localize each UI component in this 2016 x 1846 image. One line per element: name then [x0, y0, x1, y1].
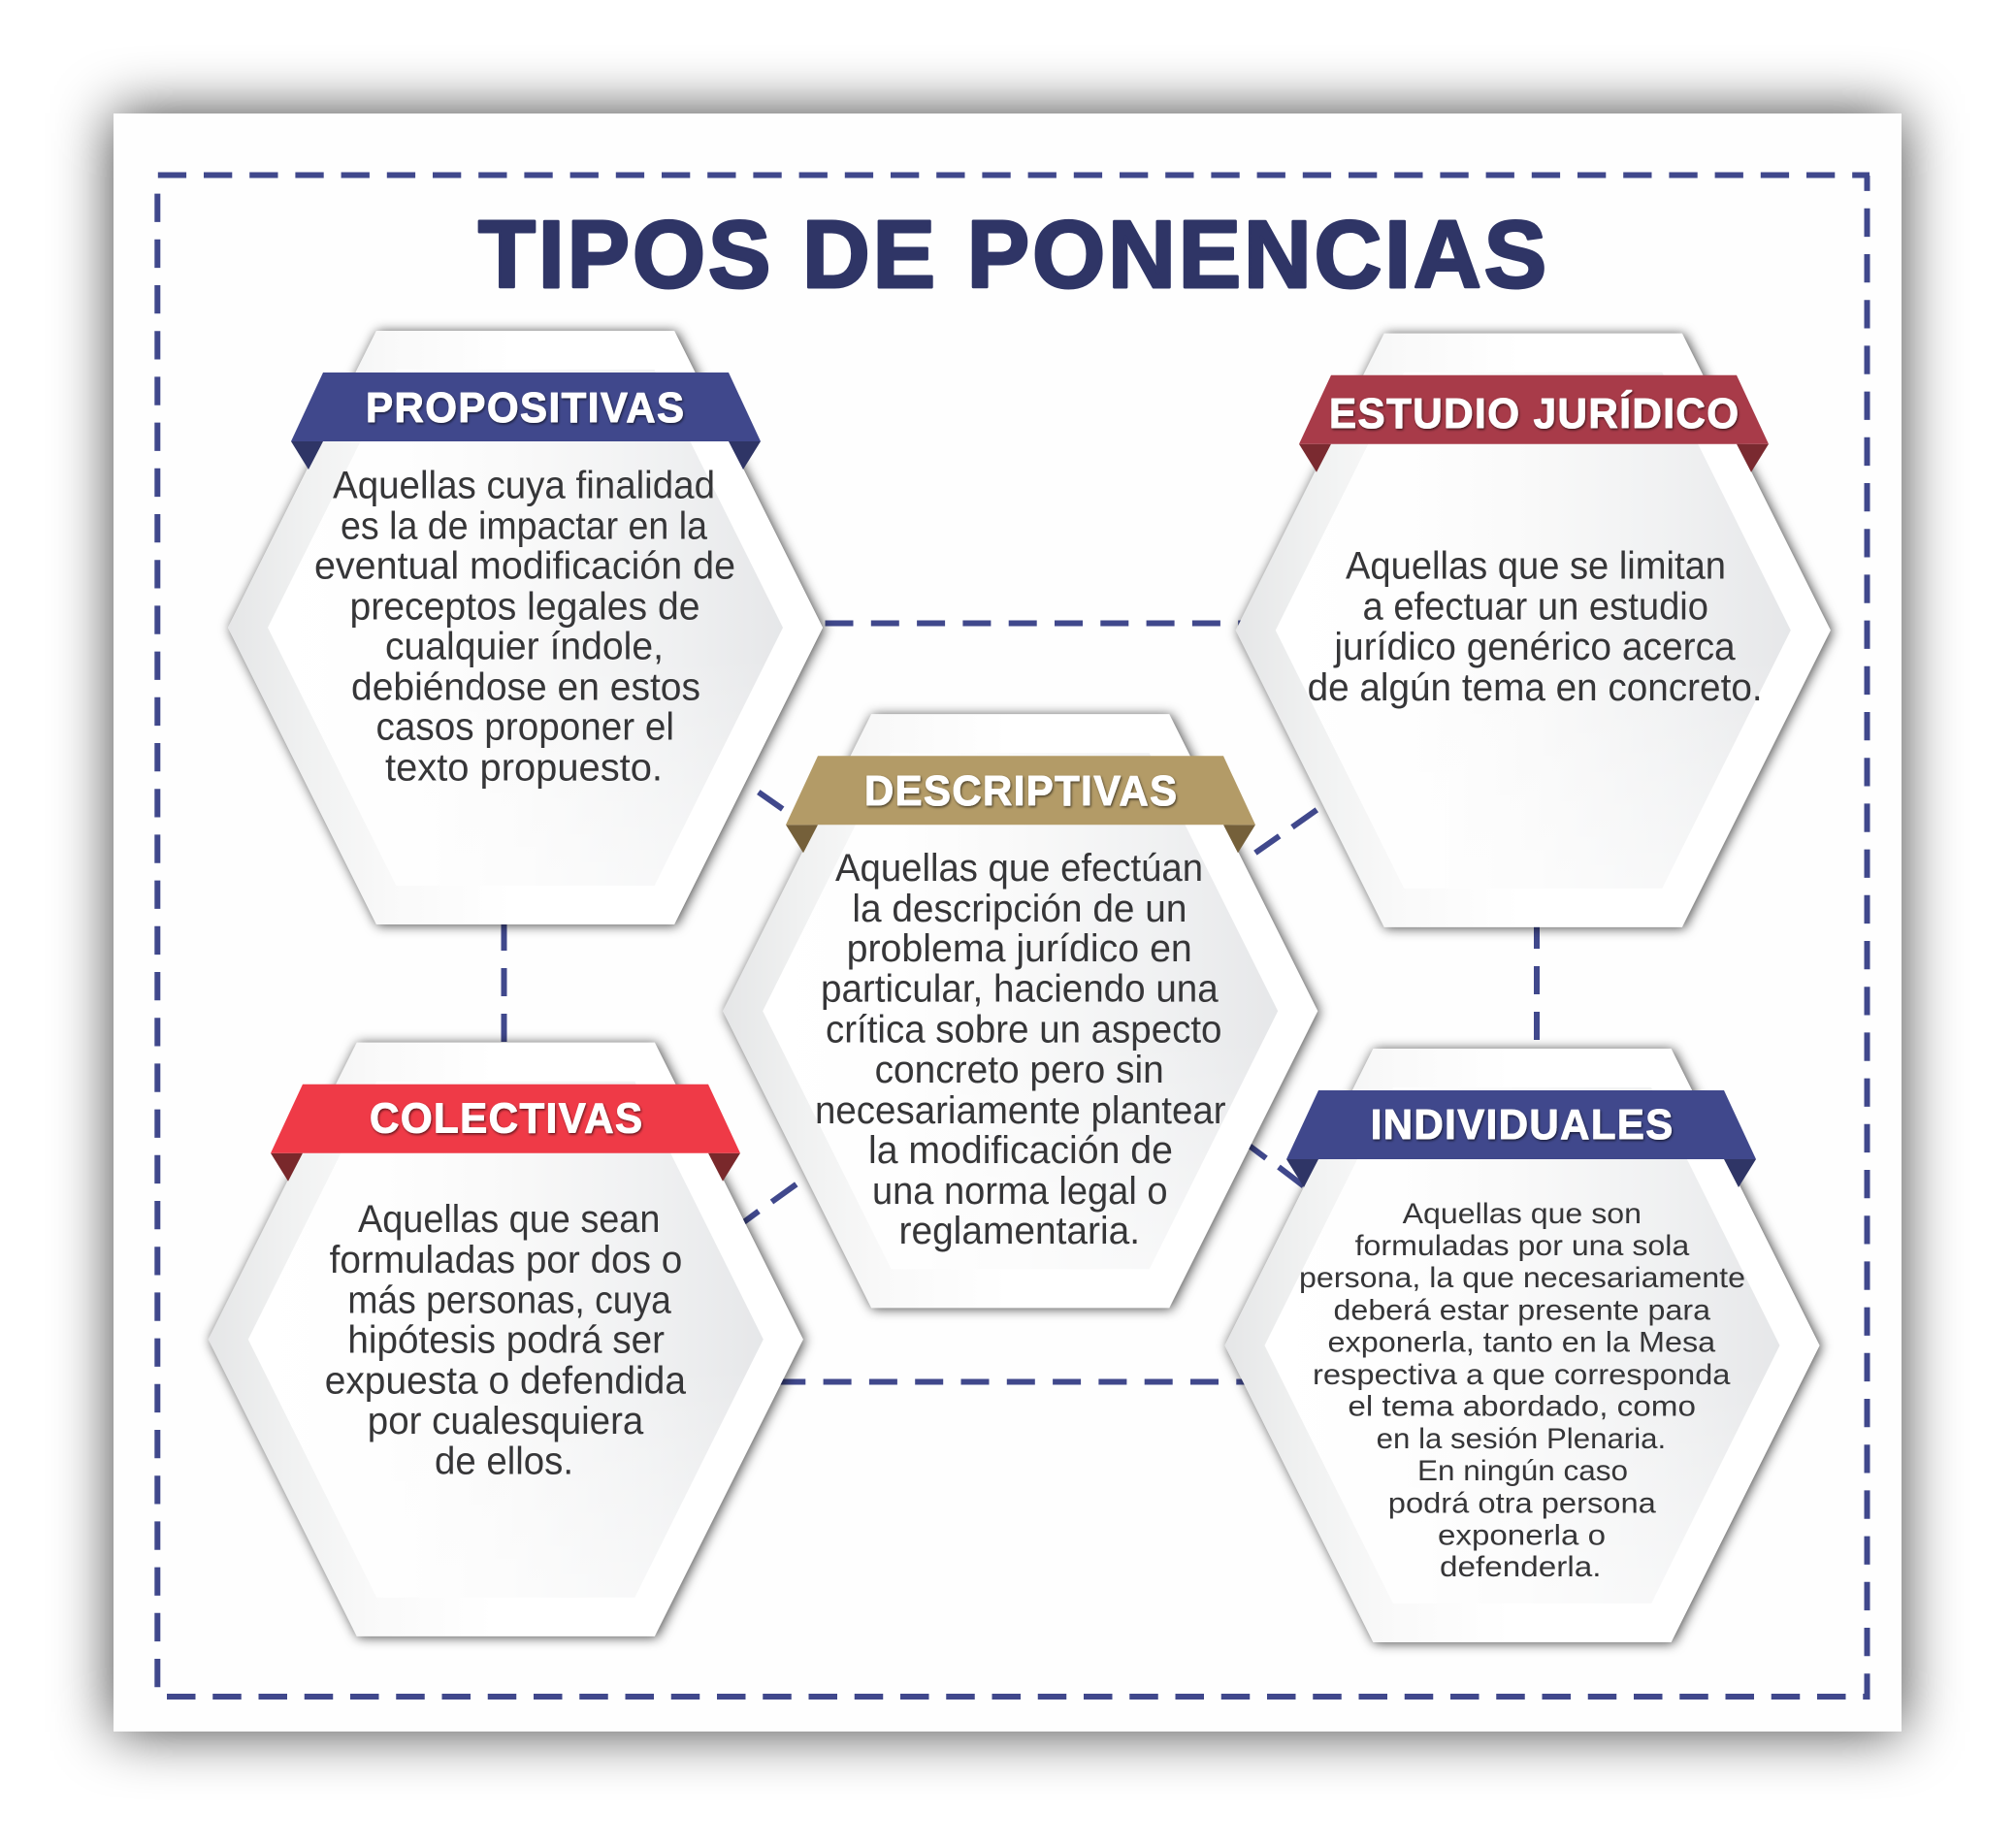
text: Propositivas description: preceptos legales de — [349, 585, 700, 628]
banner: Colectivas — [271, 1085, 740, 1182]
hexagon: Estudio Jurídico — [1236, 334, 1831, 927]
text: Colectivas description: hipótesis podrá ser — [347, 1319, 665, 1362]
hexagon: Propositivas — [228, 331, 823, 924]
text: Colectivas description: formuladas por dos o — [330, 1239, 682, 1281]
text: Descriptivas description: Aquellas que efectúan — [835, 847, 1203, 890]
panel: white sheet — [114, 113, 1902, 1732]
text: Individuales description: en la sesión Plenaria. — [1377, 1423, 1666, 1455]
text: Descriptivas description: particular, haciendo una — [821, 968, 1219, 1011]
text: Individuales description: exponerla, tanto en la Mesa — [1327, 1326, 1716, 1358]
banner: Estudio Jurídico — [1299, 375, 1769, 472]
text: Individuales description: el tema abordado, como — [1348, 1391, 1696, 1423]
text: Estudio Jurídico description: de algún tema en concreto. — [1308, 666, 1763, 709]
heading: Propositivas: PROPOSITIVAS — [366, 384, 685, 432]
heading: Individuales: INDIVIDUALES — [1371, 1101, 1675, 1149]
heading: Colectivas: COLECTIVAS — [370, 1094, 644, 1143]
text: Descriptivas description: problema jurídico en — [847, 927, 1192, 970]
text: Colectivas description: expuesta o defendida — [325, 1359, 687, 1402]
title: TIPOS DE PONENCIAS — [478, 201, 1549, 308]
panel: Propositivas — [228, 331, 823, 924]
text: Individuales description: En ningún caso — [1417, 1455, 1628, 1487]
dashed frame — [157, 175, 1870, 1700]
panel: Individuales — [1224, 1049, 1820, 1642]
text: Estudio Jurídico description: a efectuar un estudio — [1362, 586, 1708, 629]
text: Individuales description: defenderla. — [1440, 1551, 1601, 1583]
text: Descriptivas description: necesariamente plantear — [815, 1089, 1226, 1132]
text: Colectivas description — [325, 1198, 687, 1483]
text: Propositivas description — [314, 464, 735, 789]
heading: Descriptivas: DESCRIPTIVAS — [864, 767, 1178, 815]
panel: Descriptivas — [723, 714, 1317, 1308]
connectors: dashed lines between hexagons — [504, 623, 1537, 1381]
text: Individuales description: deberá estar presente para — [1333, 1294, 1711, 1327]
text: Individuales description: Aquellas que son — [1403, 1198, 1642, 1230]
text: Individuales description: respectiva a que corresponda — [1313, 1359, 1731, 1391]
text: Individuales description: exponerla o — [1438, 1519, 1606, 1551]
text: Individuales description — [1299, 1198, 1745, 1583]
text: Colectivas description: de ellos. — [435, 1441, 573, 1483]
banner: Descriptivas — [786, 756, 1255, 853]
hexagon: Individuales — [1224, 1049, 1820, 1642]
text: Estudio Jurídico description: Aquellas que se limitan — [1346, 545, 1726, 588]
text: Estudio Jurídico description: jurídico genérico acerca — [1333, 626, 1736, 668]
text: Estudio Jurídico description — [1308, 545, 1763, 709]
text: Individuales description: persona, la que necesariamente — [1299, 1262, 1745, 1294]
text: Descriptivas description: la modificación de — [868, 1129, 1173, 1172]
heading: Estudio Jurídico: ESTUDIO JURÍDICO — [1329, 389, 1740, 437]
text: Propositivas description: cualquier índole, — [385, 625, 664, 667]
text: Propositivas description: Aquellas cuya finalidad — [333, 464, 715, 506]
text: Descriptivas description — [815, 847, 1226, 1252]
panel: Estudio Jurídico — [1236, 334, 1831, 927]
text: Propositivas description: texto propuesto. — [385, 746, 663, 789]
text: Propositivas description: debiéndose en estos — [351, 665, 700, 708]
hexagon: Descriptivas — [723, 714, 1317, 1308]
banner: Propositivas — [291, 372, 761, 470]
text: Descriptivas description: crítica sobre un aspecto — [826, 1008, 1221, 1051]
text: Descriptivas description: concreto pero sin — [875, 1049, 1164, 1091]
text: Colectivas description: más personas, cuya — [347, 1279, 671, 1321]
hexagon: Colectivas — [209, 1043, 803, 1636]
text: Descriptivas description: reglamentaria. — [898, 1210, 1140, 1252]
text: Descriptivas description: la descripción de un — [852, 888, 1187, 930]
banner: Individuales — [1286, 1090, 1756, 1187]
panel: Colectivas — [209, 1043, 803, 1636]
text: Colectivas description: Aquellas que sean — [358, 1198, 660, 1241]
text: Individuales description: podrá otra persona — [1388, 1487, 1656, 1519]
text: Propositivas description: casos proponer el — [376, 705, 674, 748]
text: Descriptivas description: una norma legal o — [872, 1170, 1168, 1213]
text: Individuales description: formuladas por una sola — [1355, 1230, 1690, 1262]
text: Propositivas description: eventual modificación de — [314, 544, 735, 587]
panel shadow — [114, 113, 1902, 1732]
text: Colectivas description: por cualesquiera — [368, 1400, 644, 1442]
text: Propositivas description: es la de impactar en la — [341, 504, 708, 547]
